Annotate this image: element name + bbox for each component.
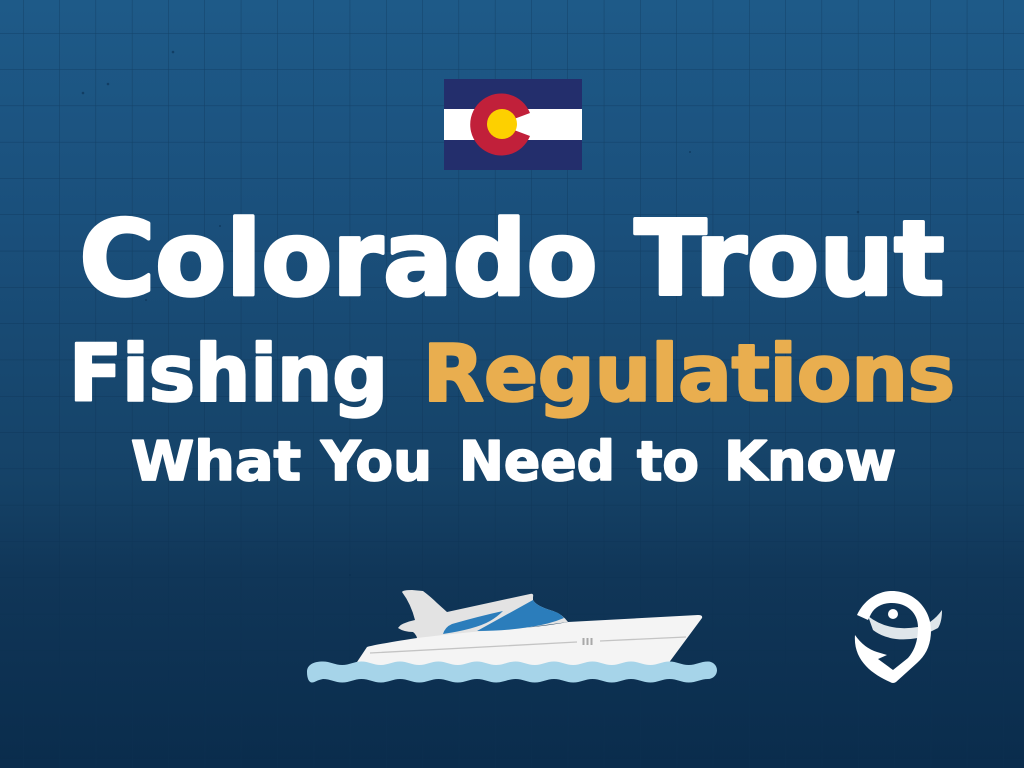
fish eye (888, 609, 898, 619)
title: Colorado Trout (80, 200, 944, 320)
boat flybridge and fin (398, 590, 568, 642)
title: Colorado Trout: Colorado (80, 200, 598, 320)
icon: Colorado flag (444, 79, 582, 170)
boat hull (353, 615, 702, 668)
title: Colorado Trout: Trout (634, 200, 944, 320)
heading: Fishing Regulations: Regulations (423, 330, 955, 420)
fish outline (855, 591, 931, 683)
subtitle: What You Need to Know: Know (724, 430, 896, 493)
boat windows (443, 611, 503, 634)
fish band and tail (868, 610, 942, 639)
subtitle: What You Need to Know: to (637, 430, 699, 493)
icon: fish logo (855, 591, 942, 683)
waves (307, 662, 717, 682)
subtitle: What You Need to Know: Need (459, 430, 615, 493)
subtitle: What You Need to Know: What (131, 430, 301, 493)
hull stripe and vents (370, 637, 686, 653)
subtitle: What You Need to Know (131, 430, 896, 493)
heading: Fishing Regulations (69, 330, 955, 420)
icon: motor yacht on waves (307, 590, 717, 682)
heading: Fishing Regulations: Fishing (69, 330, 388, 420)
subtitle: What You Need to Know: You (320, 430, 432, 493)
